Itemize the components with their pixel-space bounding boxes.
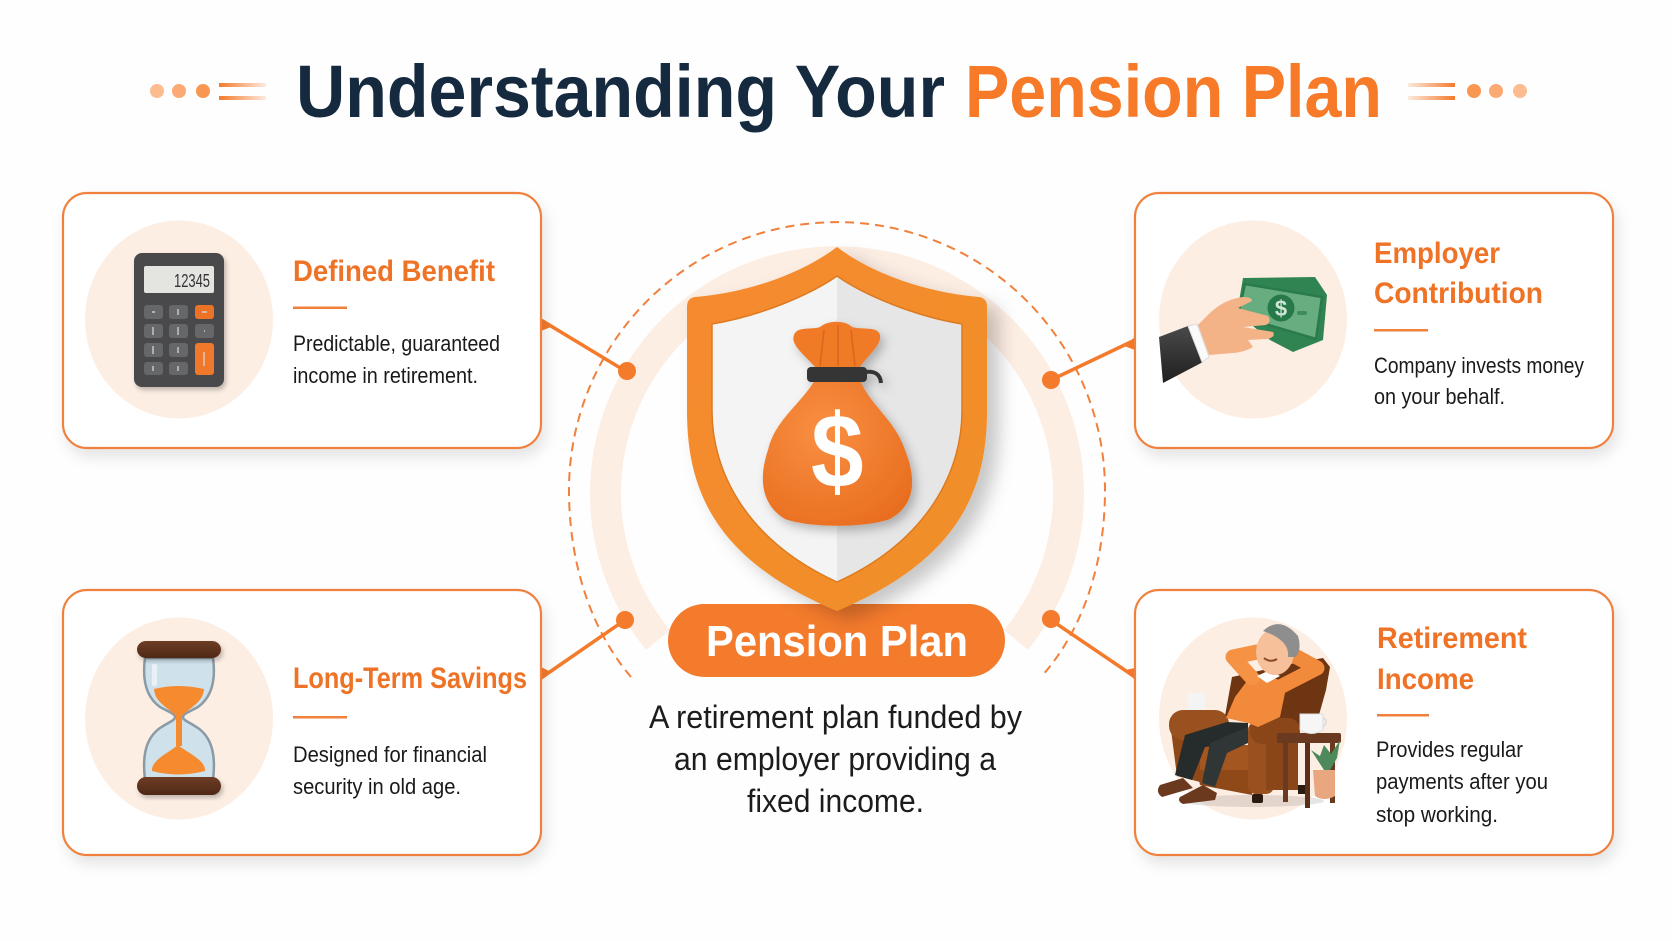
description: employer contribution: on your behalf. — [1374, 384, 1505, 409]
sub: side table — [1277, 733, 1341, 743]
icon: shield — [687, 247, 987, 611]
central description — [649, 699, 1022, 819]
title: Pension Plan — [965, 50, 1382, 133]
description: retirement income: payments after you — [1376, 769, 1548, 794]
panel: employer contribution — [1135, 193, 1613, 448]
central description: an employer providing a — [674, 741, 996, 777]
icon: hand with cash — [1159, 277, 1327, 383]
panel: defined benefit — [63, 193, 541, 448]
icon: calculator: 12345 — [174, 271, 210, 291]
description: employer contribution — [1374, 353, 1584, 409]
description: defined benefit: income in retirement. — [293, 363, 478, 388]
heading: employer contribution — [1374, 237, 1543, 310]
connector: employer contribution — [1042, 337, 1135, 389]
connector: long-term savings — [541, 611, 634, 680]
badge: pension plan — [668, 604, 1005, 677]
badge: pension plan: Pension Plan — [706, 617, 968, 666]
icon: money bag — [763, 322, 912, 526]
dashed ring — [569, 222, 1105, 677]
title — [296, 50, 1382, 133]
heading: employer contribution: Employer — [1374, 237, 1500, 270]
heading: retirement income: Income — [1377, 663, 1474, 696]
connector: retirement income — [1042, 610, 1135, 680]
description: long-term savings: security in old age. — [293, 774, 461, 799]
central description: fixed income. — [747, 783, 924, 819]
icon: retiree in armchair — [1158, 624, 1341, 808]
title ornament: left — [150, 83, 266, 100]
icon: hourglass — [137, 641, 221, 795]
description: long-term savings: Designed for financial — [293, 742, 487, 767]
description: employer contribution: Company invests money — [1374, 353, 1584, 378]
description: long-term savings — [293, 742, 487, 799]
heading: retirement income — [1377, 622, 1527, 696]
icon: calculator — [134, 253, 224, 387]
heading: retirement income: Retirement — [1377, 622, 1527, 655]
heading: employer contribution: Contribution — [1374, 277, 1543, 310]
pale arc band — [606, 262, 1068, 640]
description: retirement income — [1376, 737, 1548, 827]
title ornament: right — [1408, 83, 1527, 100]
panel: retirement income — [1135, 590, 1613, 855]
panel: long-term savings — [63, 590, 541, 855]
heading: long-term savings: Long-Term Savings — [293, 662, 527, 695]
dollar sign: $ — [811, 393, 864, 510]
description: defined benefit — [293, 331, 500, 388]
central description: A retirement plan funded by — [649, 699, 1022, 735]
description: defined benefit: Predictable, guaranteed — [293, 331, 500, 356]
title: Understanding Your — [296, 50, 945, 133]
heading: defined benefit: Defined Benefit — [293, 255, 495, 288]
description: retirement income: stop working. — [1376, 802, 1498, 827]
description: retirement income: Provides regular — [1376, 737, 1523, 762]
sub: cup on armrest — [1186, 693, 1206, 710]
icon: hand with cash: $ — [1275, 296, 1287, 321]
connector: defined benefit — [541, 319, 636, 380]
